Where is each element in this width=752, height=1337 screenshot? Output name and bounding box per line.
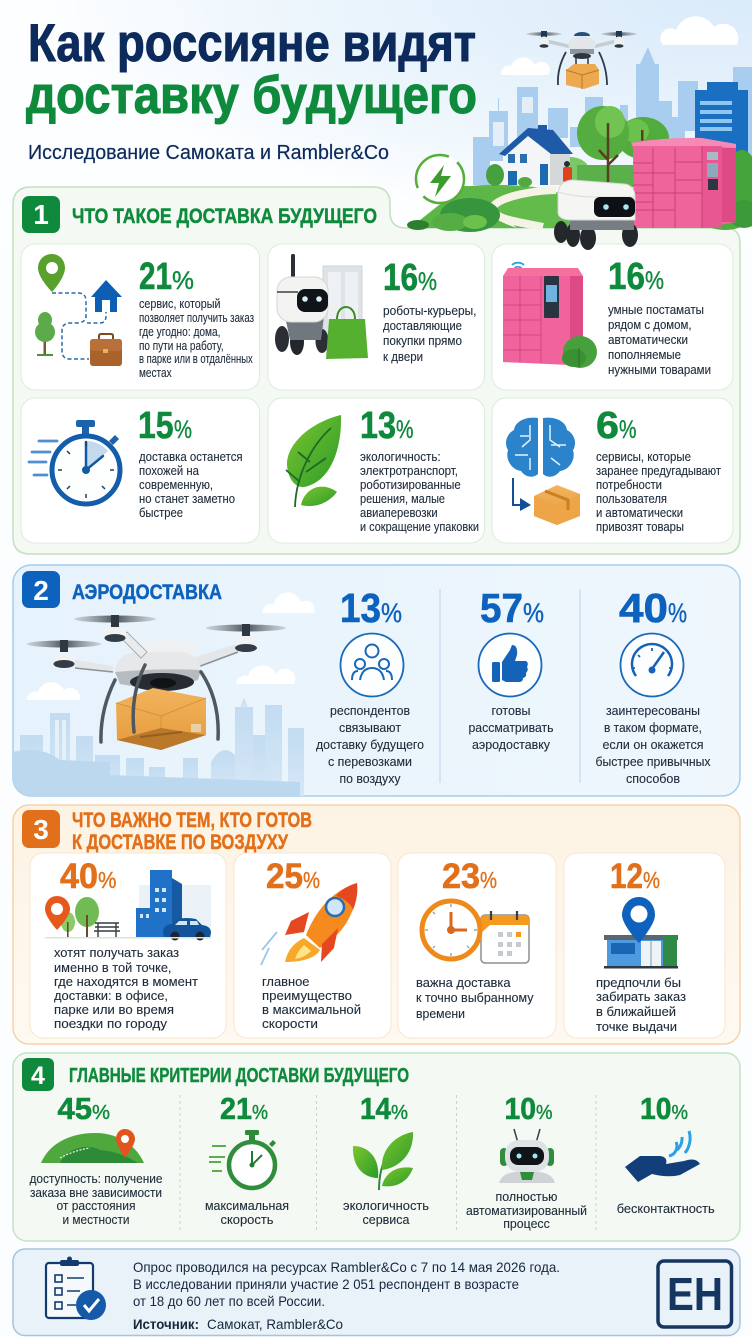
card: 21% [21,244,260,390]
criterion: 10% automated: 10 [504,1091,536,1126]
text block: сервиса [362,1212,410,1227]
icon: energy bolt circle [416,155,464,203]
text block [30,1171,162,1227]
text block [608,302,711,377]
section 3 heading: ЧТО ВАЖНО ТЕМ, КТО ГОТОВ [72,809,312,832]
stat: 57%: % [523,598,544,628]
icon: sprout leaves [353,1132,413,1190]
criterion: 10% contactless: 10 [640,1091,672,1126]
criterion: 21% max speed: 21 [220,1091,252,1126]
text block: роботы-курьеры, [383,303,476,318]
card: 16% lockers [492,244,733,390]
source line: Самокат, Rambler&Co [207,1316,343,1332]
stat 15%: 15 [138,405,174,447]
text block: рассматривать [468,720,554,735]
icon: people [340,634,404,696]
text block: аэродоставку [472,737,550,752]
text block: готовы [492,703,530,718]
criterion: 21% max speed: % [252,1102,268,1124]
text block: хотят получать заказ [54,945,179,960]
text block [54,945,198,1031]
text block: времени [416,1006,465,1021]
source line: Источник: [133,1316,199,1332]
text block [205,1198,289,1227]
text block: если он окажется [602,737,704,752]
stat 40%: % [98,867,116,893]
icon: thumbs up [478,634,542,696]
logo: EH: EH [667,1268,723,1320]
stat: 40%: 40 [619,585,668,631]
text block: рядом с домом, [608,317,692,332]
text block: связывают [339,720,401,735]
text block: скорость [220,1212,274,1227]
icon: stopwatch [209,1130,276,1188]
stat 6%: 6 [596,405,619,447]
text block: авиаперевозки [360,505,438,520]
icon: speedometer [620,634,684,696]
text block: заказа вне зависимости [30,1185,162,1200]
text block: бесконтактность [617,1201,715,1216]
panel: section 2 air delivery [13,565,740,796]
road [493,190,556,227]
stat 40% [60,857,116,896]
stat 16%: 16 [608,256,645,298]
text block [360,449,479,534]
text block: но станет заметно [139,491,235,506]
text block: в ближайшей [596,1004,676,1019]
text block [262,974,361,1031]
criterion: 45% accessibility [30,1091,162,1227]
criterion: 14% eco: 14 [360,1091,392,1126]
text block: предпочли бы [596,975,681,990]
title: Как россияне видят [28,14,476,73]
text block: полностью [496,1189,558,1204]
text block: автоматизированный [466,1203,587,1218]
text block: процесс [503,1216,550,1231]
text block [596,449,721,534]
section 1 heading: ЧТО ТАКОЕ ДОСТАВКА БУДУЩЕГО [72,205,377,228]
stat 16%: 16 [383,257,418,299]
stat 25%: % [303,867,320,893]
panel: section 1 what is future delivery [13,187,740,554]
icon: clock and calendar [422,901,529,963]
icon: courier robot with door and bag [275,254,368,359]
text block: заинтересованы [606,703,700,718]
section 4 heading: ГЛАВНЫЕ КРИТЕРИИ ДОСТАВКИ БУДУЩЕГО [69,1065,409,1087]
icon: stopwatch [29,420,120,504]
text block: доставляющие [383,318,462,333]
stat: 40%: % [668,598,687,628]
stat 13%: % [396,416,414,444]
section 3 number badge: 3 [33,814,49,845]
text block [596,975,686,1034]
text block: по пути на работу, [139,338,224,353]
criterion: 10% contactless [617,1091,715,1216]
text block [316,703,424,786]
stat: 40% [596,585,711,786]
section 3 heading [72,809,312,854]
text block: похожей на [139,463,200,478]
text block: в таком формате, [604,720,702,735]
stat 15%: % [174,416,192,444]
title: доставку будущего [26,66,477,125]
stat: 57%: 57 [480,585,523,631]
criterion: 10% contactless: % [672,1102,688,1124]
card: 12% pick-up point [564,853,725,1038]
text block: пользователя [596,491,667,506]
stat 6%: % [619,416,636,444]
text block: скорости [262,1016,318,1031]
icon: delivery drone with parcel [526,31,637,89]
text block: доставка останется [139,449,243,464]
bushes [407,150,752,232]
text block: в парке или в отдалённых [139,351,253,366]
text block: забирать заказ [596,989,686,1004]
text block: и сокращение упаковки [360,519,479,534]
trees [577,106,669,182]
text block: нужными товарами [608,362,711,377]
city skyline in section 2 [13,698,304,796]
panel: section 4 main criteria [13,1053,740,1241]
text block: к точно выбранному [416,990,534,1005]
stat 23%: % [480,867,497,893]
hill foreground left [410,186,543,228]
text block: роботизированные [360,477,461,492]
text block [383,303,476,364]
text block: от расстояния [56,1198,136,1213]
text block: быстрее привычных [596,754,711,769]
stat 25%: 25 [266,857,303,896]
text block: с перевозками [328,754,412,769]
stat: 13% [316,585,424,786]
text block: респондентов [330,703,410,718]
text block: где угодно: дома, [139,324,220,339]
stat 16%: % [418,268,437,296]
card: 40% location [30,853,226,1038]
card: 25% speed [234,853,391,1038]
parcel locker [631,138,736,228]
text block: пополняемые [608,347,681,362]
stat: 57% [468,585,554,752]
stat 21%: % [172,267,194,295]
card: 16% robots [268,244,484,390]
text block: автоматически [608,332,688,347]
text block [343,1198,429,1227]
stat 21%: 21 [139,256,172,298]
text block: главное [262,974,310,989]
text block [139,296,254,380]
section 3 number badge [22,810,60,848]
card: 13% ecology [268,398,484,543]
section 2 heading: АЭРОДОСТАВКА [72,581,222,604]
section 1 number badge: 1 [33,199,49,230]
text block: к двери [383,349,423,364]
stat 23%: 23 [442,857,480,896]
icon: city, park, pin and car [45,870,211,940]
stat: 13%: % [381,598,402,628]
title [26,14,477,125]
methodology text [133,1259,560,1309]
text block: в максимальной [262,1002,361,1017]
stat 6% [596,405,636,447]
criterion: 14% eco [343,1091,429,1227]
text block: где находятся в момент [54,974,198,989]
text block: способов [626,771,680,786]
text block: точке выдачи [596,1019,677,1034]
icon: route between points [35,254,122,366]
text block [139,449,243,520]
text block: позволяет получить заказ [139,310,254,325]
text block: доступность: получение [30,1171,162,1186]
section 3 heading: К ДОСТАВКЕ ПО ВОЗДУХУ [72,831,289,854]
text block: решения, малые [360,491,445,506]
logo: EH [658,1261,732,1327]
criterion: 14% eco: % [391,1102,408,1124]
text block [466,1189,587,1231]
card: 6% prediction [492,398,733,543]
methodology text: В исследовании приняли участие 2 051 респондент в возрасте [133,1276,519,1292]
methodology text: от 18 до 60 лет по всей России. [133,1293,325,1309]
icon: green leaf [286,415,341,507]
text block: современную, [139,477,213,492]
methodology text: Опрос проводился на ресурсах Rambler&Co с 7 по 14 мая 2026 года. [133,1259,560,1275]
icon: robot head [499,1129,555,1183]
criterion: 21% max speed [205,1091,289,1227]
clouds [501,16,738,75]
text block: электротранспорт, [360,463,458,478]
text block: сервисы, которые [596,449,691,464]
stat 12%: 12 [610,857,643,896]
stat 40%: 40 [60,857,98,896]
house [486,125,573,187]
text block: быстрее [139,505,183,520]
source line [133,1316,343,1332]
text block: важна доставка [416,975,511,990]
text block: по воздуху [340,771,401,786]
text block [596,703,711,786]
icon: terrain with pin [41,1129,144,1163]
text block: и местности [62,1212,130,1227]
icon: hand with wireless waves [625,1131,700,1182]
text block: покупки прямо [383,333,462,348]
stat: 13%: 13 [340,585,381,631]
stat 16%: % [645,267,664,295]
stat 13%: 13 [360,405,396,447]
criterion: 10% automated: % [536,1102,553,1124]
card: 15% speed [21,398,260,543]
icon: rocket [261,883,357,965]
text block: потребности [596,477,662,492]
text block: местах [139,365,172,380]
header background sky [0,0,752,245]
text block: сервис, который [139,296,220,311]
section 4 number badge: 4 [31,1062,45,1090]
text block: именно в той точке, [54,960,172,975]
criterion: 10% automated [466,1091,587,1231]
green hill [463,185,640,228]
text block: поездки по городу [54,1016,168,1031]
icon: smart parcel locker [503,263,597,368]
text block: умные постаматы [608,302,704,317]
section 4 number badge [22,1058,54,1091]
text block: преимущество [262,988,352,1003]
illustration: future delivery city scene [407,16,752,250]
card: 23% exact time [398,853,556,1038]
panel: footer methodology [13,1249,740,1336]
panel: section 3 what matters [13,805,740,1044]
text block: привозят товары [596,519,684,534]
icon: brain and parcel [506,418,580,525]
text block: максимальная [205,1198,289,1213]
delivery robot [554,161,638,250]
text block: заранее предугадывают [596,463,721,478]
stat 12%: % [643,867,660,893]
section 2 number badge: 2 [33,575,49,606]
background greenery [550,157,635,187]
text block: доставки: в офисе, [54,988,168,1003]
text block: доставку будущего [316,737,424,752]
clouds [27,593,315,700]
icon: checklist clipboard [46,1256,106,1320]
text block [468,703,554,752]
text block [416,975,534,1021]
text block: экологичность: [360,449,441,464]
criterion: 45% accessibility: % [92,1102,110,1124]
icon: pick-up store with pin [604,897,678,968]
text block: и автоматически [596,505,683,520]
subtitle: Исследование Самоката и Rambler&Co [28,142,389,164]
criterion: 45% accessibility: 45 [58,1091,92,1126]
section 2 number badge [22,571,60,608]
text block: экологичность [343,1198,429,1213]
text block: парке или во время [54,1002,174,1017]
skyline [473,47,752,185]
section 1 number badge [22,196,60,233]
illustration: large drone with parcel [27,615,286,750]
